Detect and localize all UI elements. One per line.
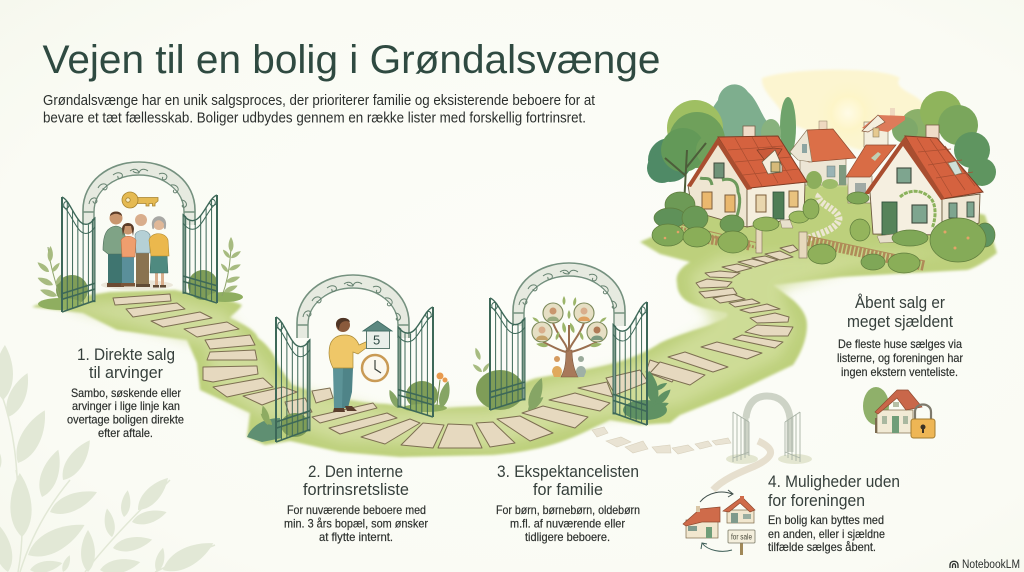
open sale label: ingen ekstern venteliste. (841, 365, 958, 379)
path stones: step 1 to 2 (113, 294, 333, 416)
step 4 label (768, 473, 900, 554)
step 2 label: at flytte internt. (319, 530, 393, 544)
step 2 label (284, 463, 428, 544)
step 4 label: En bolig kan byttes med (768, 513, 884, 527)
background trees (706, 84, 996, 186)
icon: house with padlock (863, 387, 935, 438)
icon: clock (362, 355, 388, 381)
decorative foliage: bottom-left sprigs (0, 345, 218, 572)
for sale sign: for sale (731, 532, 752, 542)
plant right of gate 3 (623, 370, 673, 420)
garden path stones near houses (800, 195, 839, 242)
step 3 label: for familie (533, 481, 603, 499)
father (103, 212, 126, 287)
step 3 label (496, 463, 640, 544)
intro text (43, 93, 595, 126)
step 4 label: for foreningen (768, 492, 865, 510)
house scene (647, 70, 996, 273)
step 1: plants and gate (36, 162, 243, 312)
winding green lawn path (32, 185, 997, 457)
step 4 label: 4. Muligheder uden (768, 473, 900, 491)
arrow: top (700, 490, 733, 502)
step 1 label: overtage boligen direkte (67, 412, 184, 426)
step 2 label: min. 3 års bopæl, som ønsker (284, 516, 428, 530)
sun glow (762, 70, 925, 155)
open sale label: listerne, og foreningen har (837, 351, 963, 365)
man pressing doorbell (329, 318, 372, 412)
step 1 label: arvinger i lige linje kan (72, 399, 180, 413)
open sale label: meget sjældent (847, 313, 953, 331)
arrow: bottom (701, 543, 732, 551)
plant left of gate 2 (247, 405, 309, 442)
step 3 label: m.fl. af nuværende eller (510, 516, 625, 530)
step 1 label: Sambo, søskende eller (71, 386, 181, 400)
step 2: plants, man and gate (247, 275, 453, 442)
icon: house number sign: 5 (373, 332, 380, 348)
plant left of gate 1 (36, 246, 88, 310)
middle right house (846, 145, 896, 203)
step 2 label: fortrinsretsliste (303, 481, 409, 499)
intro text: Grøndalsvænge har en unik salgsproces, der prioriterer familie og eksisterende beboere for at (43, 93, 595, 109)
step 1 label (67, 346, 184, 440)
step 3 label: For børn, børnebørn, oldebørn (496, 503, 640, 517)
family tree icon (532, 296, 607, 377)
icon: house number sign (363, 321, 392, 348)
right cottage (864, 125, 983, 243)
step 3 label: tidligere beboere. (525, 530, 610, 544)
step 1 label: til arvinger (89, 364, 163, 382)
family of four (101, 212, 173, 290)
faded stones toward gate 4 (592, 427, 731, 454)
left cottage (687, 126, 807, 228)
plant right of gate 1 (188, 237, 243, 302)
middle back house (790, 121, 856, 189)
path stones: step 2 to 3 (312, 360, 680, 448)
title: Vejen til en bolig i Grøndalsvænge (42, 38, 661, 82)
plant left of gate 3 (472, 347, 547, 413)
step 3 label: 3. Ekspektancelisten (497, 463, 639, 481)
house-scene path stones (722, 245, 798, 272)
house B (723, 496, 755, 523)
open sale label (837, 293, 963, 379)
hedges and bushes (652, 192, 995, 273)
gate 2 (276, 275, 433, 442)
step 4 label: tilfælde sælges åbent. (768, 540, 876, 554)
far house (862, 108, 905, 147)
portraits (532, 303, 607, 342)
path stones: step 3 to open sale (650, 271, 793, 385)
grandmother (149, 216, 169, 288)
house A (683, 506, 720, 538)
icon: two houses swapping and for-sale sign (683, 490, 755, 555)
left big tree (647, 100, 728, 205)
gate 3 (490, 263, 647, 425)
gate 1 (62, 162, 217, 312)
fences (657, 219, 925, 266)
step 1 label: efter aftale. (98, 426, 153, 440)
intro text: bevare et tæt fællesskab. Boliger udbydes gennem en række lister med forskellig fortrinsret. (43, 110, 586, 126)
icon: golden key (122, 192, 158, 208)
grandfather (135, 214, 150, 287)
step 3: plants, family tree and gate (472, 263, 673, 425)
daughter (121, 223, 136, 286)
open sale label: Åbent salg er (855, 293, 945, 312)
step 4: faded gate and winding path (713, 396, 812, 490)
step 2 label: For nuværende beboere med (287, 503, 426, 517)
open sale label: De fleste huse sælges via (838, 337, 962, 351)
step 2 label: 2. Den interne (308, 463, 403, 481)
two children (552, 356, 586, 377)
plant right of gate 2 (387, 372, 453, 412)
step 4 label: en anden, eller i sjældne (768, 527, 885, 541)
step 1 label: 1. Direkte salg (77, 346, 175, 364)
